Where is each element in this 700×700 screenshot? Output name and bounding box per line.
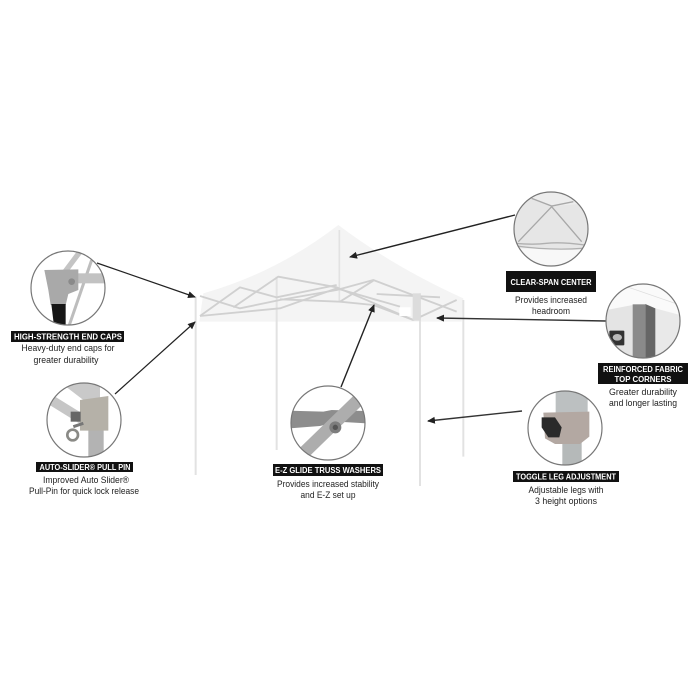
arrow: clear-span — [350, 215, 515, 257]
reinforced corner patch — [413, 293, 421, 321]
arrow: toggle leg — [428, 411, 522, 421]
description: Adjustable legs with — [528, 485, 604, 496]
description: Heavy-duty end caps for — [22, 343, 114, 354]
icon: clear-span detail — [510, 190, 590, 268]
label bar — [513, 471, 619, 482]
icon: pull pin detail — [47, 383, 121, 458]
description: Pull-Pin for quick lock release — [29, 486, 139, 497]
label text: CLEAR-SPAN CENTER — [510, 278, 592, 287]
panel: clear-span center — [506, 190, 596, 317]
description: headroom — [532, 306, 570, 317]
arrow: end caps — [97, 263, 195, 297]
arrow: truss washers — [341, 305, 374, 387]
label bar — [11, 331, 124, 342]
panel: high-strength end caps — [11, 251, 124, 366]
description: Improved Auto Slider® — [43, 475, 129, 486]
canopy tent — [196, 225, 463, 486]
label bar — [598, 363, 688, 384]
tent roof — [199, 225, 463, 322]
description: greater durability — [34, 355, 99, 366]
label text: TOP CORNERS — [614, 375, 672, 384]
label bar — [273, 464, 383, 476]
description: Provides increased — [515, 295, 587, 306]
icon: truss washer detail — [290, 386, 367, 460]
panel: e-z glide truss washers — [273, 386, 383, 501]
label text: REINFORCED FABRIC — [603, 365, 683, 374]
label text: TOGGLE LEG ADJUSTMENT — [516, 472, 616, 482]
icon: end cap detail — [31, 251, 105, 326]
white window — [399, 307, 411, 316]
truss frame — [200, 277, 457, 320]
label bar — [506, 271, 596, 292]
panel: reinforced fabric top corners — [598, 280, 690, 409]
description: and longer lasting — [609, 398, 677, 409]
description: Greater durability — [609, 387, 677, 398]
icon: toggle leg detail — [528, 390, 602, 468]
description: Provides increased stability — [277, 479, 379, 490]
tent legs — [196, 230, 463, 486]
label text: AUTO-SLIDER® PULL PIN — [40, 463, 131, 472]
description: 3 height options — [535, 496, 597, 507]
label text: HIGH-STRENGTH END CAPS — [14, 332, 123, 342]
panel: auto-slider pull pin — [29, 383, 139, 497]
label bar — [36, 462, 133, 472]
panel: toggle leg adjustment — [513, 390, 619, 507]
arrow: auto-slider — [115, 322, 195, 394]
icon: fabric corner detail — [605, 283, 681, 359]
label text: E-Z GLIDE TRUSS WASHERS — [275, 466, 382, 475]
arrow: reinforced corners — [437, 318, 606, 321]
description: and E-Z set up — [300, 490, 356, 501]
